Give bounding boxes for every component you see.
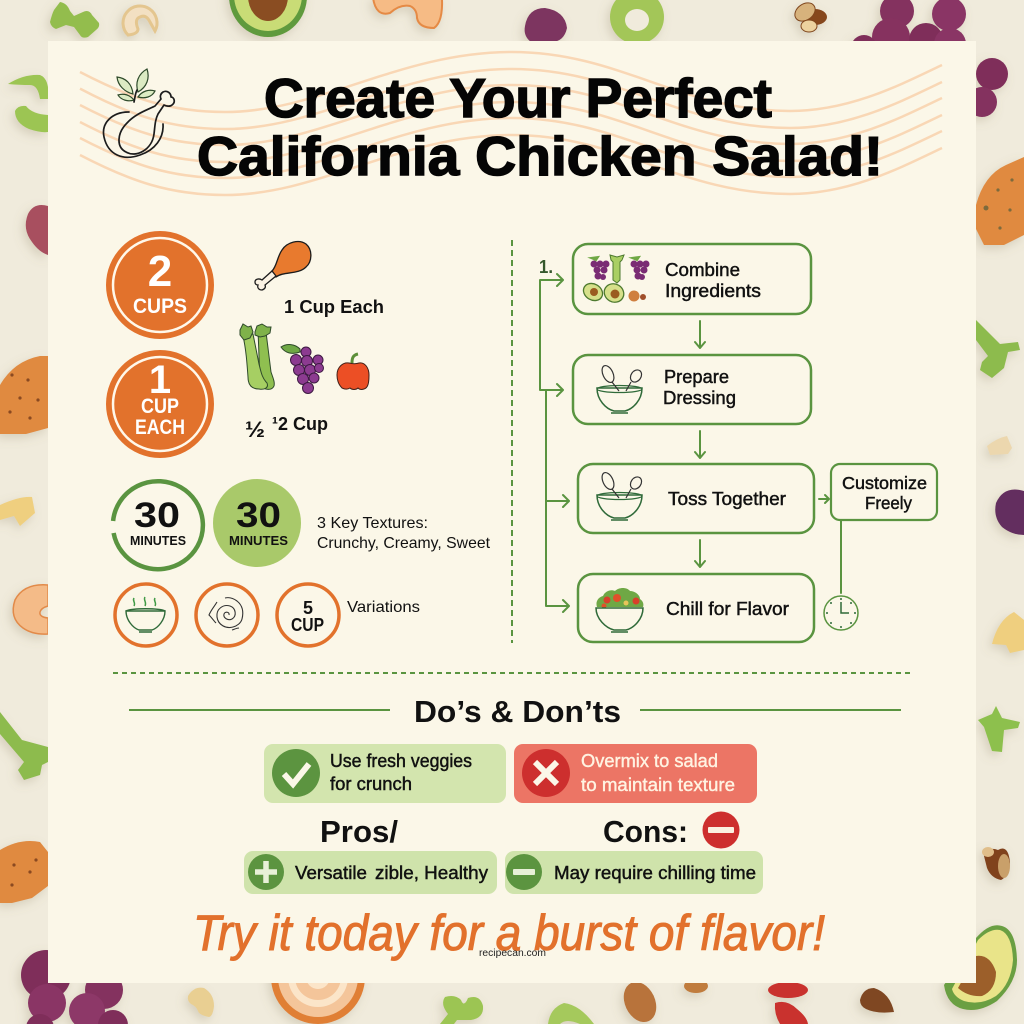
icon: orange drumstick bbox=[255, 242, 311, 290]
box: customize freely bbox=[831, 464, 937, 520]
header waves bbox=[80, 52, 942, 195]
heading: cons: Cons: bbox=[603, 814, 688, 849]
icon: celery bbox=[240, 324, 274, 389]
icon: plus bbox=[248, 854, 284, 890]
text: half cup: ½ bbox=[245, 417, 265, 442]
box: customize freely: Freely bbox=[865, 493, 912, 513]
icon: salad bowl bbox=[596, 588, 643, 632]
icon: check bbox=[272, 749, 320, 797]
title: California Chicken Salad! bbox=[197, 125, 883, 187]
pros card bbox=[244, 851, 497, 894]
top border items bbox=[50, 0, 966, 61]
badge: 1 cup each: EACH bbox=[135, 416, 185, 439]
call to action: Try it today for a burst of flavor! bbox=[193, 905, 825, 961]
text: key textures: Crunchy, Creamy, Sweet bbox=[317, 535, 491, 552]
pros card: Versatile bbox=[295, 863, 367, 883]
cons card bbox=[505, 851, 763, 894]
timer ring: 30 minutes: MINUTES bbox=[130, 533, 186, 548]
vertical dashed divider bbox=[511, 240, 513, 643]
text: half cup bbox=[245, 413, 328, 442]
don't card: to maintain texture bbox=[581, 775, 735, 795]
do card: Use fresh veggies bbox=[330, 751, 472, 771]
badge: 1 cup each: 1 bbox=[149, 358, 171, 402]
badge: 5 cup: CUP bbox=[291, 615, 324, 635]
filled badge: 30 minutes bbox=[213, 479, 301, 567]
badge: 1 cup each: CUP bbox=[141, 395, 179, 418]
timer ring: 30 minutes: 30 bbox=[134, 496, 180, 535]
left border items bbox=[0, 75, 48, 903]
badge: 2 cups: 2 bbox=[148, 247, 172, 296]
step 2: prepare dressing: Prepare bbox=[664, 367, 729, 387]
title: Create Your Perfect bbox=[264, 67, 772, 129]
don't card bbox=[514, 744, 757, 803]
step 1: combine ingredients: Ingredients bbox=[665, 281, 761, 301]
text: variations: Variations bbox=[347, 599, 420, 616]
step 4: chill for flavor bbox=[578, 574, 814, 642]
icon: red bell pepper bbox=[337, 354, 369, 390]
text: key textures: 3 Key Textures: bbox=[317, 515, 428, 532]
heading: pros: Pros/ bbox=[320, 814, 398, 849]
do card bbox=[264, 744, 506, 803]
text: 1 cup each: 1 Cup Each bbox=[284, 296, 384, 317]
filled badge: 30 minutes: 30 bbox=[236, 496, 281, 535]
icon: cross bbox=[522, 749, 570, 797]
timer ring: 30 minutes bbox=[113, 481, 203, 569]
badge: 5 cup: 5 bbox=[303, 598, 313, 618]
step 1: combine ingredients: Combine bbox=[665, 260, 740, 280]
icon: chicken drumstick with herb sprig bbox=[104, 69, 174, 157]
icon: minus bbox=[506, 854, 542, 890]
pros card: zible, Healthy bbox=[375, 863, 488, 883]
title bbox=[197, 67, 883, 187]
icon: bowl and whisk bbox=[597, 471, 644, 520]
flow connectors bbox=[540, 274, 841, 612]
text: key textures bbox=[317, 515, 491, 552]
box: customize freely: Customize bbox=[842, 473, 927, 493]
right border items bbox=[967, 58, 1024, 880]
icon: red minus bbox=[702, 812, 740, 848]
badge: 2 cups bbox=[106, 231, 214, 339]
badge: 1 cup each bbox=[106, 350, 214, 458]
icon: texture swirl bbox=[196, 584, 258, 646]
badge: 5 cup bbox=[277, 584, 339, 646]
do card: for crunch bbox=[330, 774, 412, 794]
icon: steaming bowl bbox=[115, 584, 177, 646]
icon: grapes bbox=[281, 345, 324, 394]
badge: 2 cups: CUPS bbox=[133, 295, 187, 318]
don't card: Overmix to salad bbox=[581, 751, 718, 771]
step number: 1. bbox=[539, 257, 553, 277]
icon: ingredients bbox=[580, 255, 650, 306]
step 1: combine ingredients bbox=[573, 244, 811, 314]
source credit: recipecan.com bbox=[479, 948, 546, 959]
icon: clock bbox=[824, 596, 858, 630]
horizontal dashed divider bbox=[113, 672, 912, 674]
cons card: May require chilling time bbox=[554, 863, 756, 883]
step 2: prepare dressing: Dressing bbox=[663, 388, 736, 408]
bottom border items bbox=[21, 925, 1017, 1024]
heading: do's and don'ts: Do’s & Don’ts bbox=[414, 694, 621, 729]
text: half cup: ¹2 Cup bbox=[272, 413, 328, 434]
step 4: chill for flavor: Chill for Flavor bbox=[666, 599, 789, 619]
step 3: toss together bbox=[578, 464, 814, 533]
icon: bowl and whisk bbox=[597, 364, 644, 413]
step 2: prepare dressing bbox=[573, 355, 811, 424]
filled badge: 30 minutes: MINUTES bbox=[229, 533, 288, 548]
step 3: toss together: Toss Together bbox=[668, 489, 786, 509]
